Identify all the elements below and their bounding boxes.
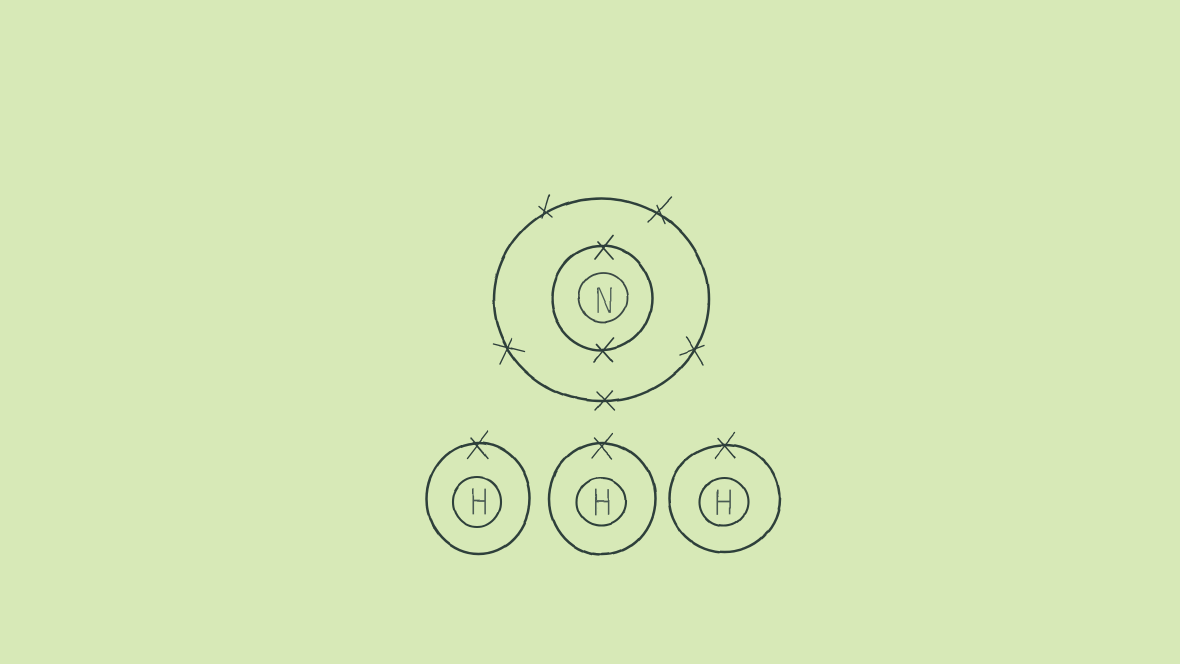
hydrogen 1 electron	[468, 432, 488, 458]
hydrogen atom 1	[427, 432, 530, 554]
hydrogen 2 shell	[549, 443, 655, 555]
hydrogen 1 symbol: H	[469, 481, 489, 525]
hydrogen 3 electron	[715, 433, 735, 458]
electron: outer top left	[539, 195, 552, 218]
hydrogen atom 3	[669, 433, 780, 552]
hydrogen 3 symbol: H	[714, 482, 734, 525]
electron: outer right	[680, 337, 704, 365]
hydrogen 3 shell	[669, 445, 780, 552]
hydrogen 1 shell	[427, 443, 530, 554]
electron: outer bottom	[595, 391, 614, 410]
electron: outer left	[493, 339, 525, 364]
nitrogen outer shell	[494, 198, 709, 401]
hydrogen 2 symbol: H	[592, 482, 612, 525]
nitrogen atom	[493, 195, 709, 410]
electron: inner bottom	[594, 338, 614, 362]
hydrogen 2 nucleus	[577, 478, 626, 525]
hydrogen atom 2	[549, 433, 655, 555]
nitrogen symbol: N	[594, 280, 614, 323]
electron: inner top	[595, 236, 613, 259]
hydrogen 3 nucleus	[700, 478, 748, 526]
nitrogen inner shell	[552, 246, 652, 350]
hydrogen 2 electron	[592, 433, 612, 458]
electron: outer top right	[648, 197, 671, 223]
hydrogen 1 nucleus	[453, 477, 501, 527]
nitrogen nucleus	[579, 273, 627, 322]
